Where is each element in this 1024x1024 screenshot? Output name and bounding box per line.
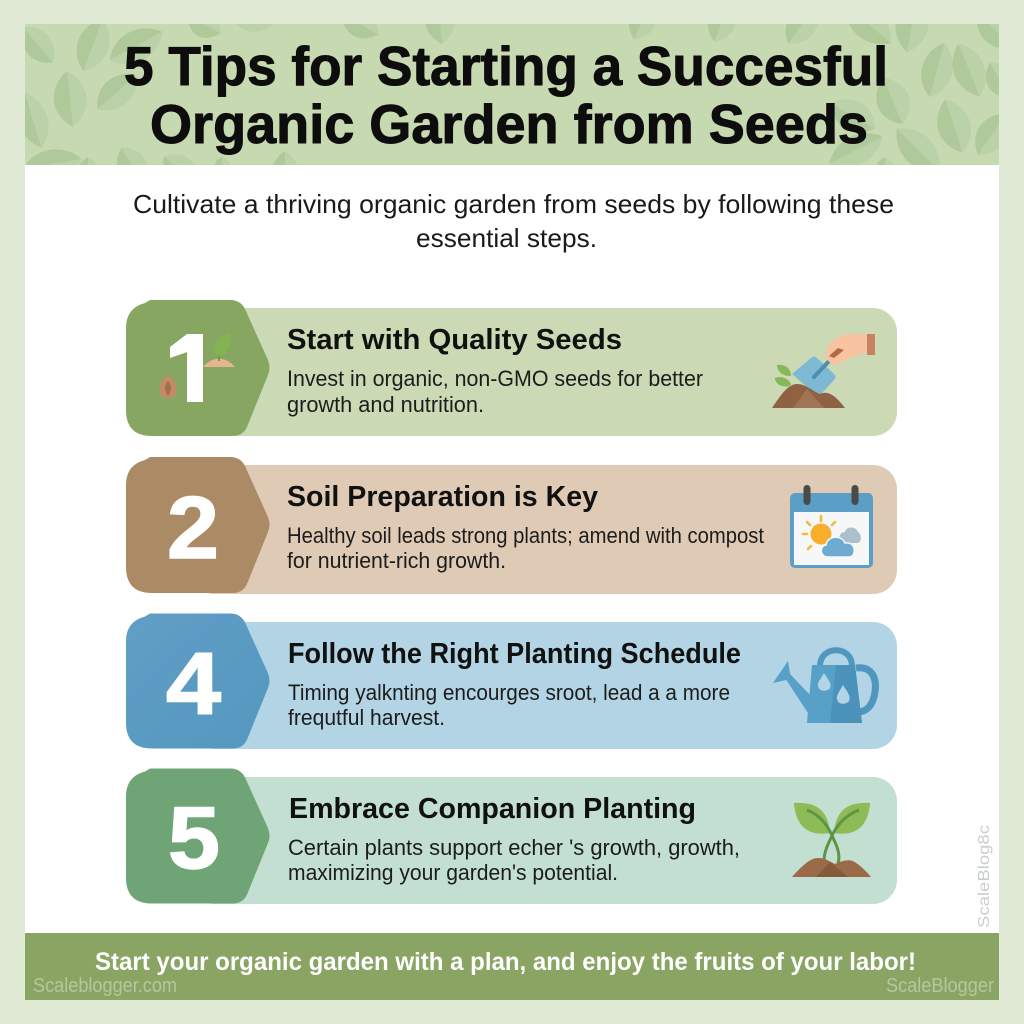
number 4: 4: [166, 634, 221, 733]
description: maximizing your garden's potential.: [288, 860, 618, 885]
badge: tip 2: [126, 457, 270, 593]
watermark right: ScaleBlogger: [886, 975, 994, 997]
intro text: Cultivate a thriving organic garden from seeds by following these: [133, 189, 894, 219]
footer message: Start your organic garden with a plan, and enjoy the fruits of your labor!: [95, 948, 916, 976]
intro text: essential steps.: [416, 223, 597, 253]
number 2: 2: [167, 478, 219, 577]
description: growth and nutrition.: [287, 392, 484, 417]
heading: Embrace Companion Planting: [289, 793, 696, 825]
title: Organic Garden from Seeds: [150, 93, 868, 155]
white content panel: [25, 165, 999, 933]
heading: Start with Quality Seeds: [287, 324, 622, 356]
badge: tip 3: [126, 614, 270, 749]
description: Timing yalknting encourges sroot, lead a a more: [288, 680, 730, 705]
panel: tip 3: [126, 614, 897, 749]
description: [288, 835, 740, 885]
description: frequtful harvest.: [288, 705, 445, 730]
number 1: 1: [172, 322, 221, 421]
title: [124, 35, 888, 155]
leaf pattern: [25, 24, 999, 165]
number 5: 5: [168, 788, 220, 887]
description: for nutrient-rich growth.: [287, 548, 506, 573]
description: [288, 680, 730, 730]
badge: tip 1: [126, 300, 270, 436]
heading: Soil Preparation is Key: [287, 481, 598, 513]
panel: tip 5: [126, 768, 897, 904]
panel: tip 1: [126, 300, 897, 436]
icon: sprout in soil: [792, 803, 871, 877]
vertical watermark: ScaleBlog8c: [976, 825, 993, 928]
icon: watering can: [773, 650, 875, 723]
panel: tip 2: [126, 457, 897, 594]
description: Certain plants support echer 's growth, growth,: [288, 835, 740, 860]
title: 5 Tips for Starting a Succesful: [124, 35, 888, 97]
footer banner: [25, 933, 999, 1000]
description: [287, 523, 764, 573]
watermark left: Scaleblogger.com: [33, 975, 177, 997]
intro text: [133, 189, 894, 253]
badge: tip 5: [126, 768, 270, 904]
description: [287, 366, 703, 417]
icon: seed: [159, 375, 177, 398]
icon: calendar with weather: [790, 485, 873, 568]
description: Healthy soil leads strong plants; amend with compost: [287, 523, 764, 548]
header banner: [25, 24, 999, 165]
number 1: [170, 334, 203, 402]
heading: Follow the Right Planting Schedule: [288, 638, 741, 670]
icon: sprout: [203, 333, 235, 367]
icon: trowel in soil: [772, 334, 875, 408]
description: Invest in organic, non-GMO seeds for better: [287, 366, 703, 391]
